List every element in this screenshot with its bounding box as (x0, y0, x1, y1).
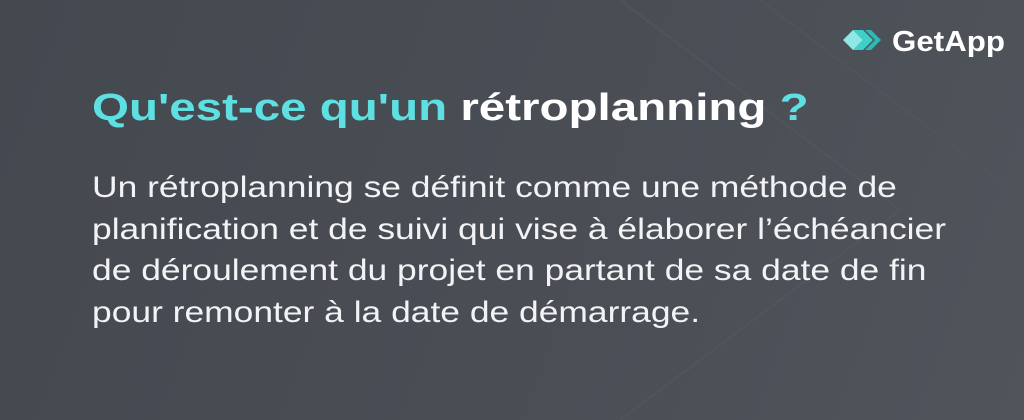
title: Qu'est-ce qu'un rétroplanning ? (92, 87, 809, 129)
definition text: de déroulement du projet en partant de sa date de fin (92, 254, 926, 287)
definition text: planification et de suivi qui vise à élaborer l’échéancier (92, 212, 946, 246)
definition text (92, 171, 946, 328)
definition text: Un rétroplanning se définit comme une méthode de (92, 171, 897, 204)
logo: GetApp: GetApp (892, 26, 1005, 58)
definition text: pour remonter à la date de démarrage. (92, 296, 700, 328)
logo: GetApp (843, 26, 1005, 58)
